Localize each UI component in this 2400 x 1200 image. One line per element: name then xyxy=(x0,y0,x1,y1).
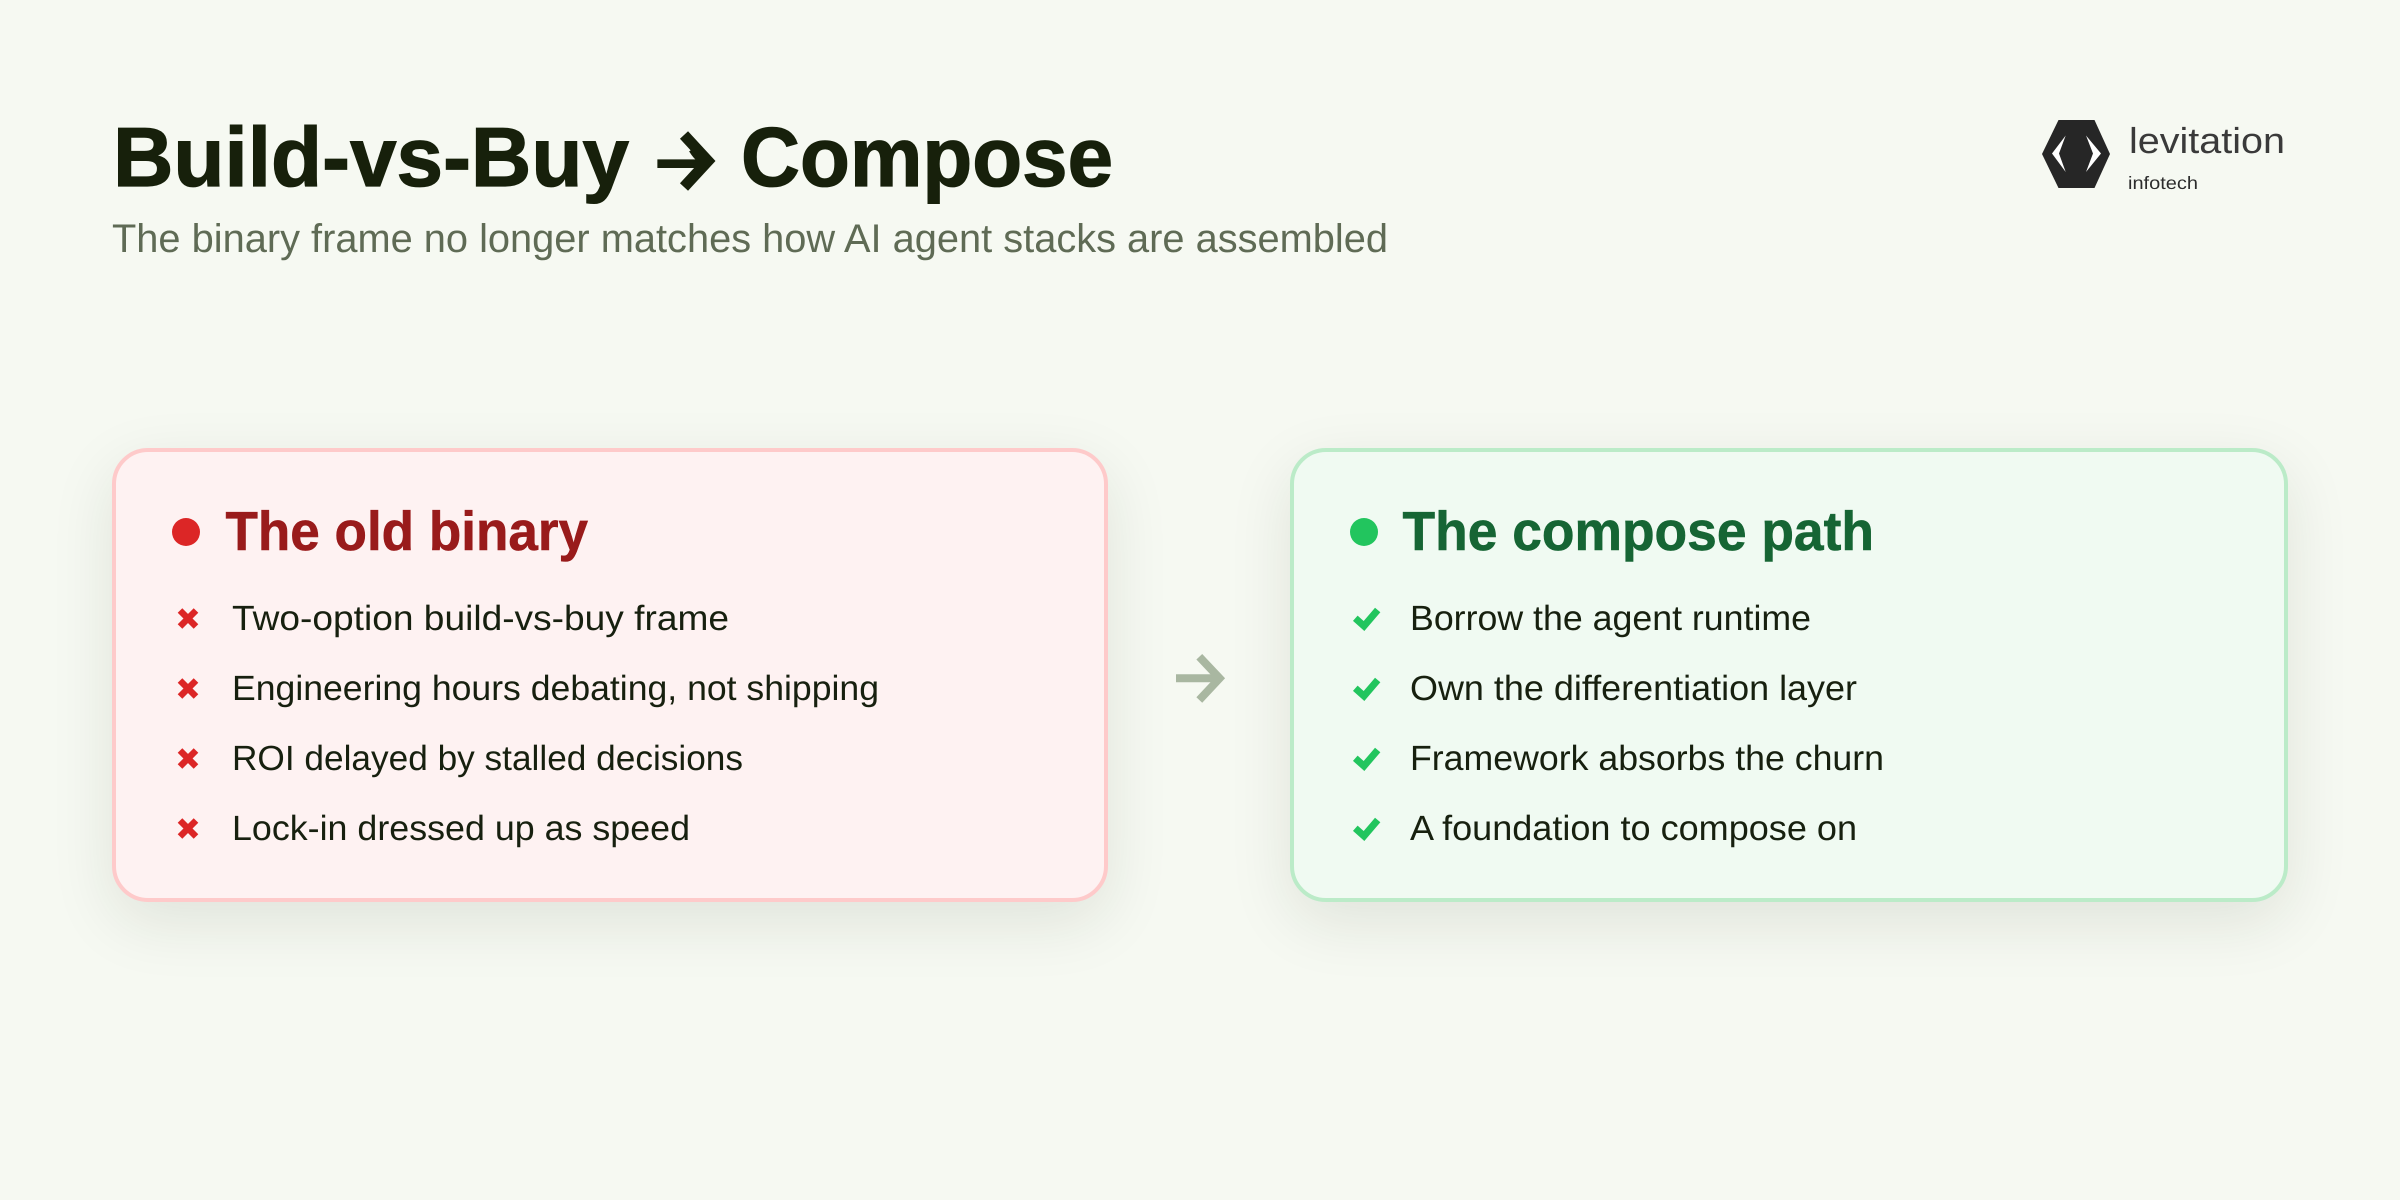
title: Build-vs-Buy xyxy=(113,110,629,204)
heading text: The old binary xyxy=(226,500,588,562)
subtitle: The binary frame no longer matches how AI agent stacks are assembled xyxy=(112,217,1388,261)
row 3: Framework absorbs the churn xyxy=(1410,739,1884,778)
row 4: Lock-in dressed up as speed xyxy=(232,809,690,848)
row 2: Own the differentiation layer xyxy=(1410,669,1857,708)
heading text: The compose path xyxy=(1402,500,1874,562)
panel heading: the compose path xyxy=(1350,500,1874,562)
header: title and subtitle xyxy=(112,110,1388,261)
list: compose path benefits xyxy=(1355,599,1884,848)
logo: levitation infotech xyxy=(2042,120,2285,193)
logo wordmark: levitation xyxy=(2129,120,2285,161)
row 2: Engineering hours debating, not shipping xyxy=(232,669,879,708)
arrow between panels xyxy=(1176,657,1220,700)
panel heading: the old binary xyxy=(172,500,588,562)
row 3: ROI delayed by stalled decisions xyxy=(232,739,743,778)
title: Compose xyxy=(741,110,1113,204)
row 1: Two-option build-vs-buy frame xyxy=(232,599,729,638)
title xyxy=(113,110,1113,207)
panel: the compose path xyxy=(1290,448,2288,902)
icon: hexagon logo mark xyxy=(2042,120,2110,188)
status dot green xyxy=(1350,518,1378,546)
panel: the old binary xyxy=(112,448,1108,902)
title arrow head xyxy=(684,135,708,187)
title: → xyxy=(656,115,712,207)
status dot red xyxy=(172,518,200,546)
list: old binary drawbacks xyxy=(180,599,879,848)
row 1: Borrow the agent runtime xyxy=(1410,599,1811,638)
logo tagline: infotech xyxy=(2128,173,2198,193)
row 4: A foundation to compose on xyxy=(1410,809,1857,848)
